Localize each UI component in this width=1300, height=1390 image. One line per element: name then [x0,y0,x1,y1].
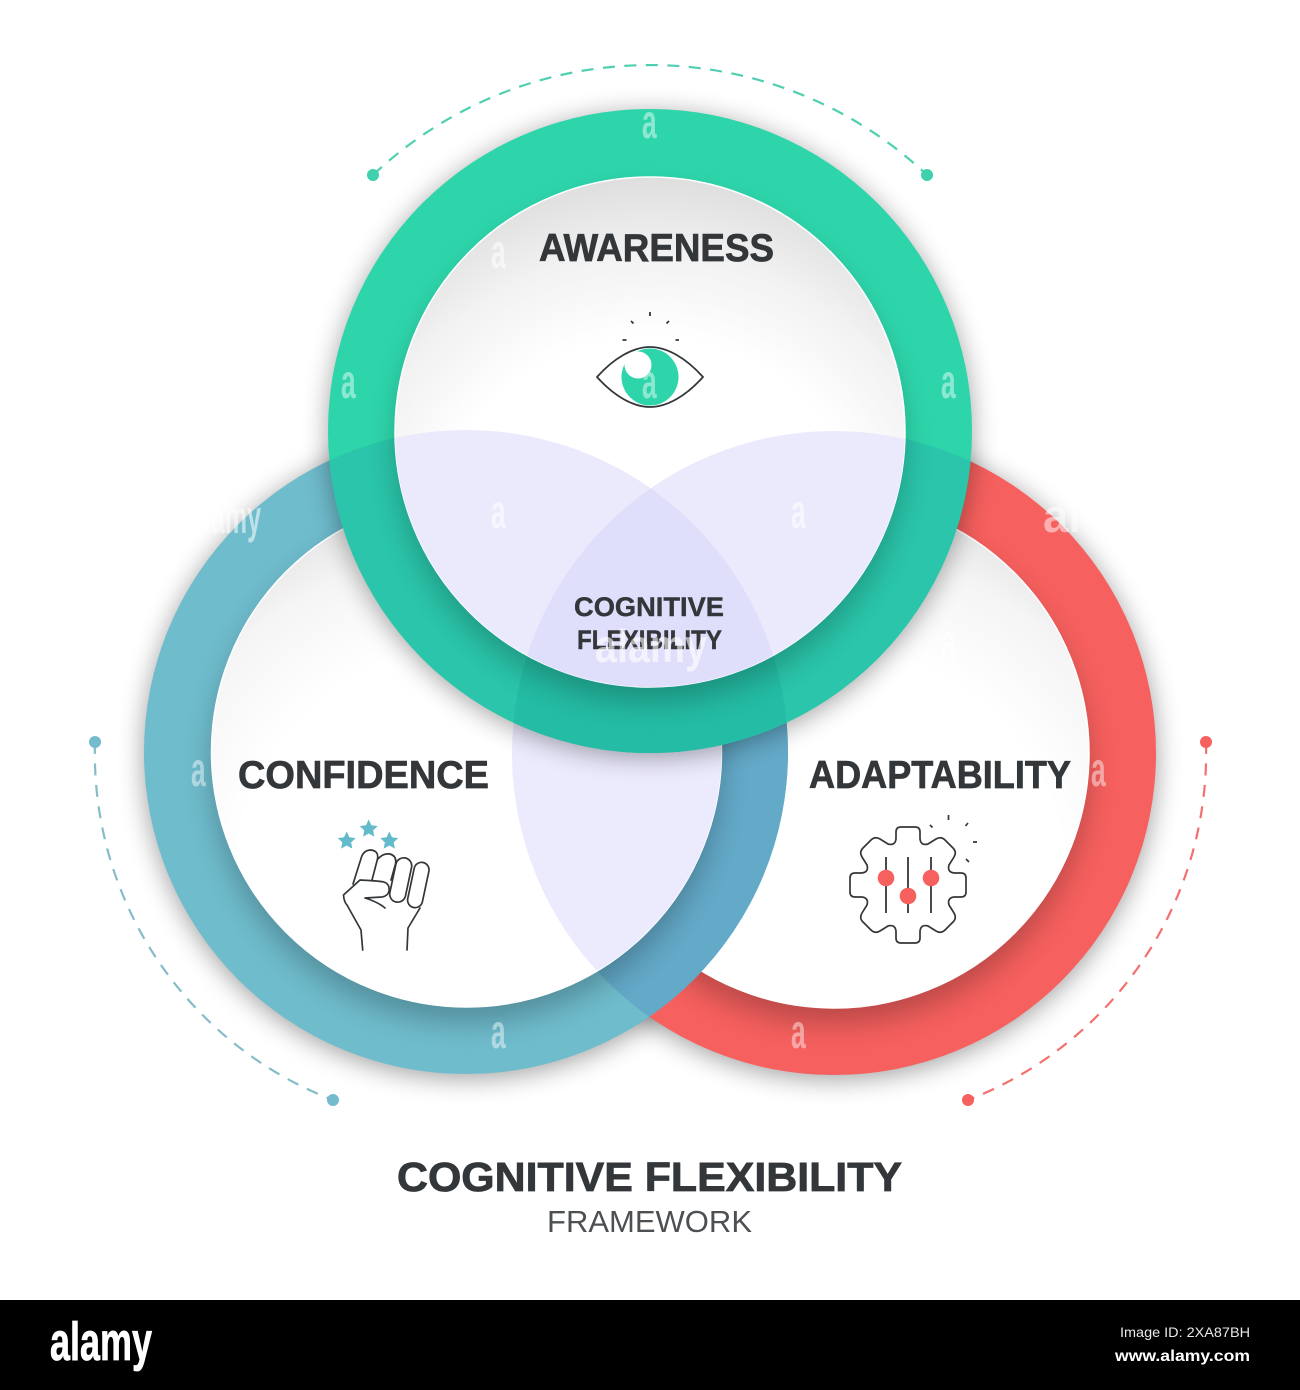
icon: gear with sliders [850,815,977,943]
watermark marks [191,96,1106,1059]
watermark marks: a [341,356,356,409]
watermark marks: a [642,356,657,409]
footer bar: www.alamy.com [1114,1348,1250,1365]
watermark marks: a [491,226,506,279]
dashed arc: top [367,65,933,181]
watermark marks: a [1091,744,1106,797]
subtitle: FRAMEWORK [547,1204,752,1239]
icon: fist with stars [338,820,430,950]
title: COGNITIVE FLEXIBILITY [397,1154,902,1200]
watermark marks: a [191,744,206,797]
watermark marks: a [791,865,806,918]
circle shadow: awareness [328,113,972,757]
circle: confidence ring [144,460,788,1074]
label: centre overlap: COGNITIVE [574,592,724,622]
watermark marks: a [491,486,506,539]
watermark marks: a [491,865,506,918]
label: centre overlap [574,592,724,655]
watermark marks: a [491,1006,506,1059]
overlap lens: confidence and adaptability [512,723,722,971]
footer bar: alamy [50,1312,152,1372]
overlap areas inside awareness disc [395,430,905,687]
watermark marks: a [791,1006,806,1059]
watermark marks: al [1043,490,1081,542]
watermark marks: a [941,356,956,409]
heading: adaptability: ADAPTABILITY [809,754,1071,797]
watermark marks: alamy [595,620,707,672]
watermark marks: a [941,616,956,669]
footer bar [0,1300,1300,1390]
heading: awareness: AWARENESS [539,227,774,270]
watermark marks: a [791,486,806,539]
heading: confidence: CONFIDENCE [238,754,489,797]
outer drop shadows of lower circles [144,434,1156,1079]
icon: eye [597,312,703,407]
watermark marks: lamy [204,491,261,543]
label: centre overlap: FLEXIBILITY [577,625,722,655]
dashed arc: left [89,736,339,1106]
circle: awareness ring [328,109,972,753]
watermark marks: a [642,96,657,149]
footer bar: Image ID: 2XA87BH [1120,1324,1250,1340]
dashed arc: right [962,736,1212,1106]
circle: adaptability ring [649,462,1156,1075]
